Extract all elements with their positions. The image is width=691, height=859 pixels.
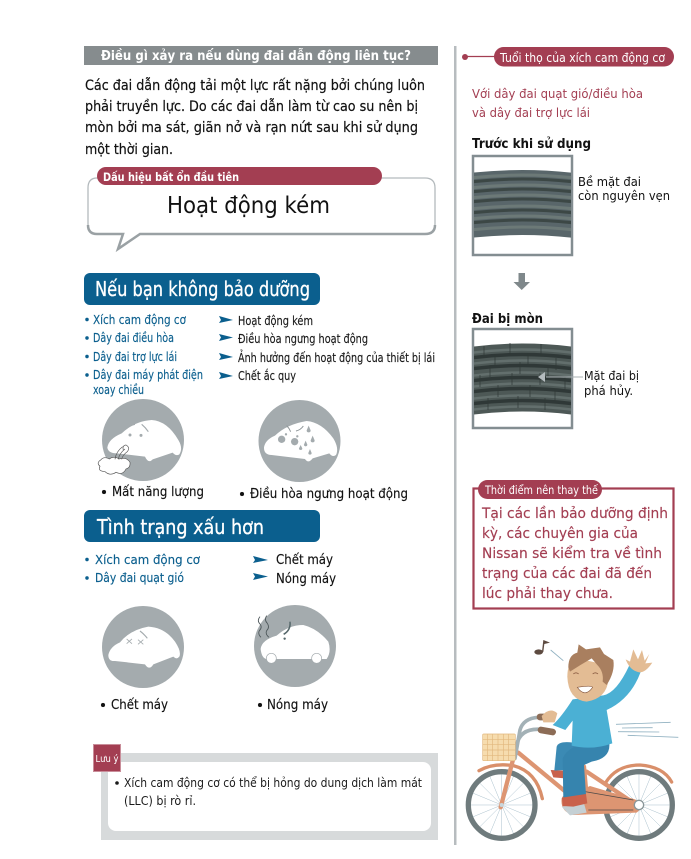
label: intact surface: Bề mặt đai bbox=[578, 175, 641, 189]
label: worn belt: Đai bị mòn bbox=[472, 312, 543, 327]
list: belts at risk: Dây đai quạt gió bbox=[95, 570, 184, 585]
arrow: down bbox=[514, 273, 530, 290]
list: severe consequences: Nóng máy bbox=[276, 572, 336, 587]
subtitle bbox=[472, 87, 643, 120]
intro paragraph: Các đai dẫn động tải một lực rất nặng bởi chúng luôn bbox=[85, 77, 425, 94]
icon: engine dead car bbox=[102, 606, 184, 688]
list: affected belts bbox=[85, 312, 203, 397]
list: consequences with arrows: Ảnh hưởng đến hoạt động của thiết bị lái bbox=[238, 349, 435, 365]
heading pill: timing chain lifetime: Tuổi thọ của xích cam động cơ bbox=[499, 51, 666, 65]
subtitle: và dây đai trợ lực lái bbox=[472, 106, 590, 120]
list: belts at risk bbox=[85, 552, 200, 585]
caption: air conditioning stopped: Điều hòa ngưng hoạt động bbox=[250, 487, 408, 502]
callout: first warning sign: Dấu hiệu bất ổn đầu tiên bbox=[103, 169, 239, 184]
intro paragraph: một thời gian. bbox=[85, 142, 173, 158]
note panel: Lưu ý bbox=[96, 753, 119, 765]
panel: replacement timing: Tại các lần bảo dưỡng định bbox=[481, 506, 668, 522]
icon: car losing power bbox=[98, 399, 184, 481]
note panel bbox=[94, 744, 438, 840]
label: intact surface: còn nguyên vẹn bbox=[578, 189, 670, 203]
list: affected belts: Dây đai trợ lực lái bbox=[93, 349, 177, 364]
intro paragraph: mòn bởi ma sát, giãn nở và rạn nứt sau khi sử dụng bbox=[85, 120, 418, 136]
caption: engine dead: Chết máy bbox=[111, 698, 168, 713]
heading: worse condition bbox=[84, 510, 320, 542]
panel: replacement timing: trạng của các đai đã đến bbox=[482, 565, 652, 582]
heading: worse condition: Tình trạng xấu hơn bbox=[96, 515, 264, 539]
illustration: boy riding a bicycle bbox=[468, 640, 678, 838]
caption: loss of power: Mất năng lượng bbox=[112, 485, 204, 500]
caption: overheating: Nóng máy bbox=[267, 698, 328, 713]
list: consequences with arrows: Hoạt động kém bbox=[238, 313, 313, 328]
list: belts at risk: Xích cam động cơ bbox=[95, 552, 200, 567]
note panel: Xích cam động cơ có thể bị hỏng do dung dịch làm mát bbox=[124, 776, 422, 790]
list: consequences with arrows: Điều hòa ngưng hoạt động bbox=[238, 331, 368, 346]
callout: damaged surface: phá hủy. bbox=[584, 384, 633, 398]
label: before use: Trước khi sử dụng bbox=[472, 137, 591, 152]
list: severe consequences bbox=[253, 553, 336, 587]
heading: if not maintained bbox=[84, 273, 320, 305]
photo: new belt bbox=[470, 156, 575, 255]
callout: damaged surface bbox=[538, 369, 639, 398]
callout: damaged surface: Mặt đai bị bbox=[584, 369, 639, 383]
subtitle: Với dây đai quạt gió/điều hòa bbox=[472, 87, 643, 101]
heading: if not maintained: Nếu bạn không bảo dưỡng bbox=[95, 277, 310, 301]
section heading bar: Điều gì xảy ra nếu dùng đai dẫn động liên tục? bbox=[101, 49, 411, 64]
callout: first warning sign: Hoạt động kém bbox=[167, 193, 330, 219]
panel: replacement timing: Nissan sẽ kiểm tra về tình bbox=[482, 545, 662, 562]
list: affected belts: Xích cam động cơ bbox=[93, 312, 186, 327]
list: affected belts: Dây đai máy phát điện bbox=[93, 367, 203, 382]
icon: overheated car bbox=[254, 605, 336, 687]
icon: air conditioning stopped bbox=[258, 400, 340, 482]
panel: replacement timing: Thời điểm nên thay thế bbox=[484, 483, 599, 497]
note panel: (LLC) bị rò rỉ. bbox=[124, 794, 196, 808]
panel: replacement timing bbox=[474, 480, 674, 608]
list: affected belts: xoay chiều bbox=[93, 382, 144, 397]
list: consequences with arrows bbox=[219, 313, 435, 383]
heading pill: timing chain lifetime bbox=[462, 47, 674, 66]
label: intact surface bbox=[578, 175, 670, 203]
photo: worn belt bbox=[470, 329, 575, 428]
callout: first warning sign bbox=[88, 167, 435, 249]
panel: replacement timing: kỳ, các chuyên gia của bbox=[482, 526, 638, 542]
panel: replacement timing: lúc phải thay chưa. bbox=[482, 586, 613, 602]
list: consequences with arrows: Chết ắc quy bbox=[238, 368, 296, 383]
list: affected belts: Dây đai điều hòa bbox=[93, 330, 174, 345]
intro paragraph bbox=[85, 77, 425, 158]
intro paragraph: phải truyền lực. Do các đai dẫn làm từ cao su nên bị bbox=[85, 98, 418, 115]
list: severe consequences: Chết máy bbox=[276, 553, 333, 568]
